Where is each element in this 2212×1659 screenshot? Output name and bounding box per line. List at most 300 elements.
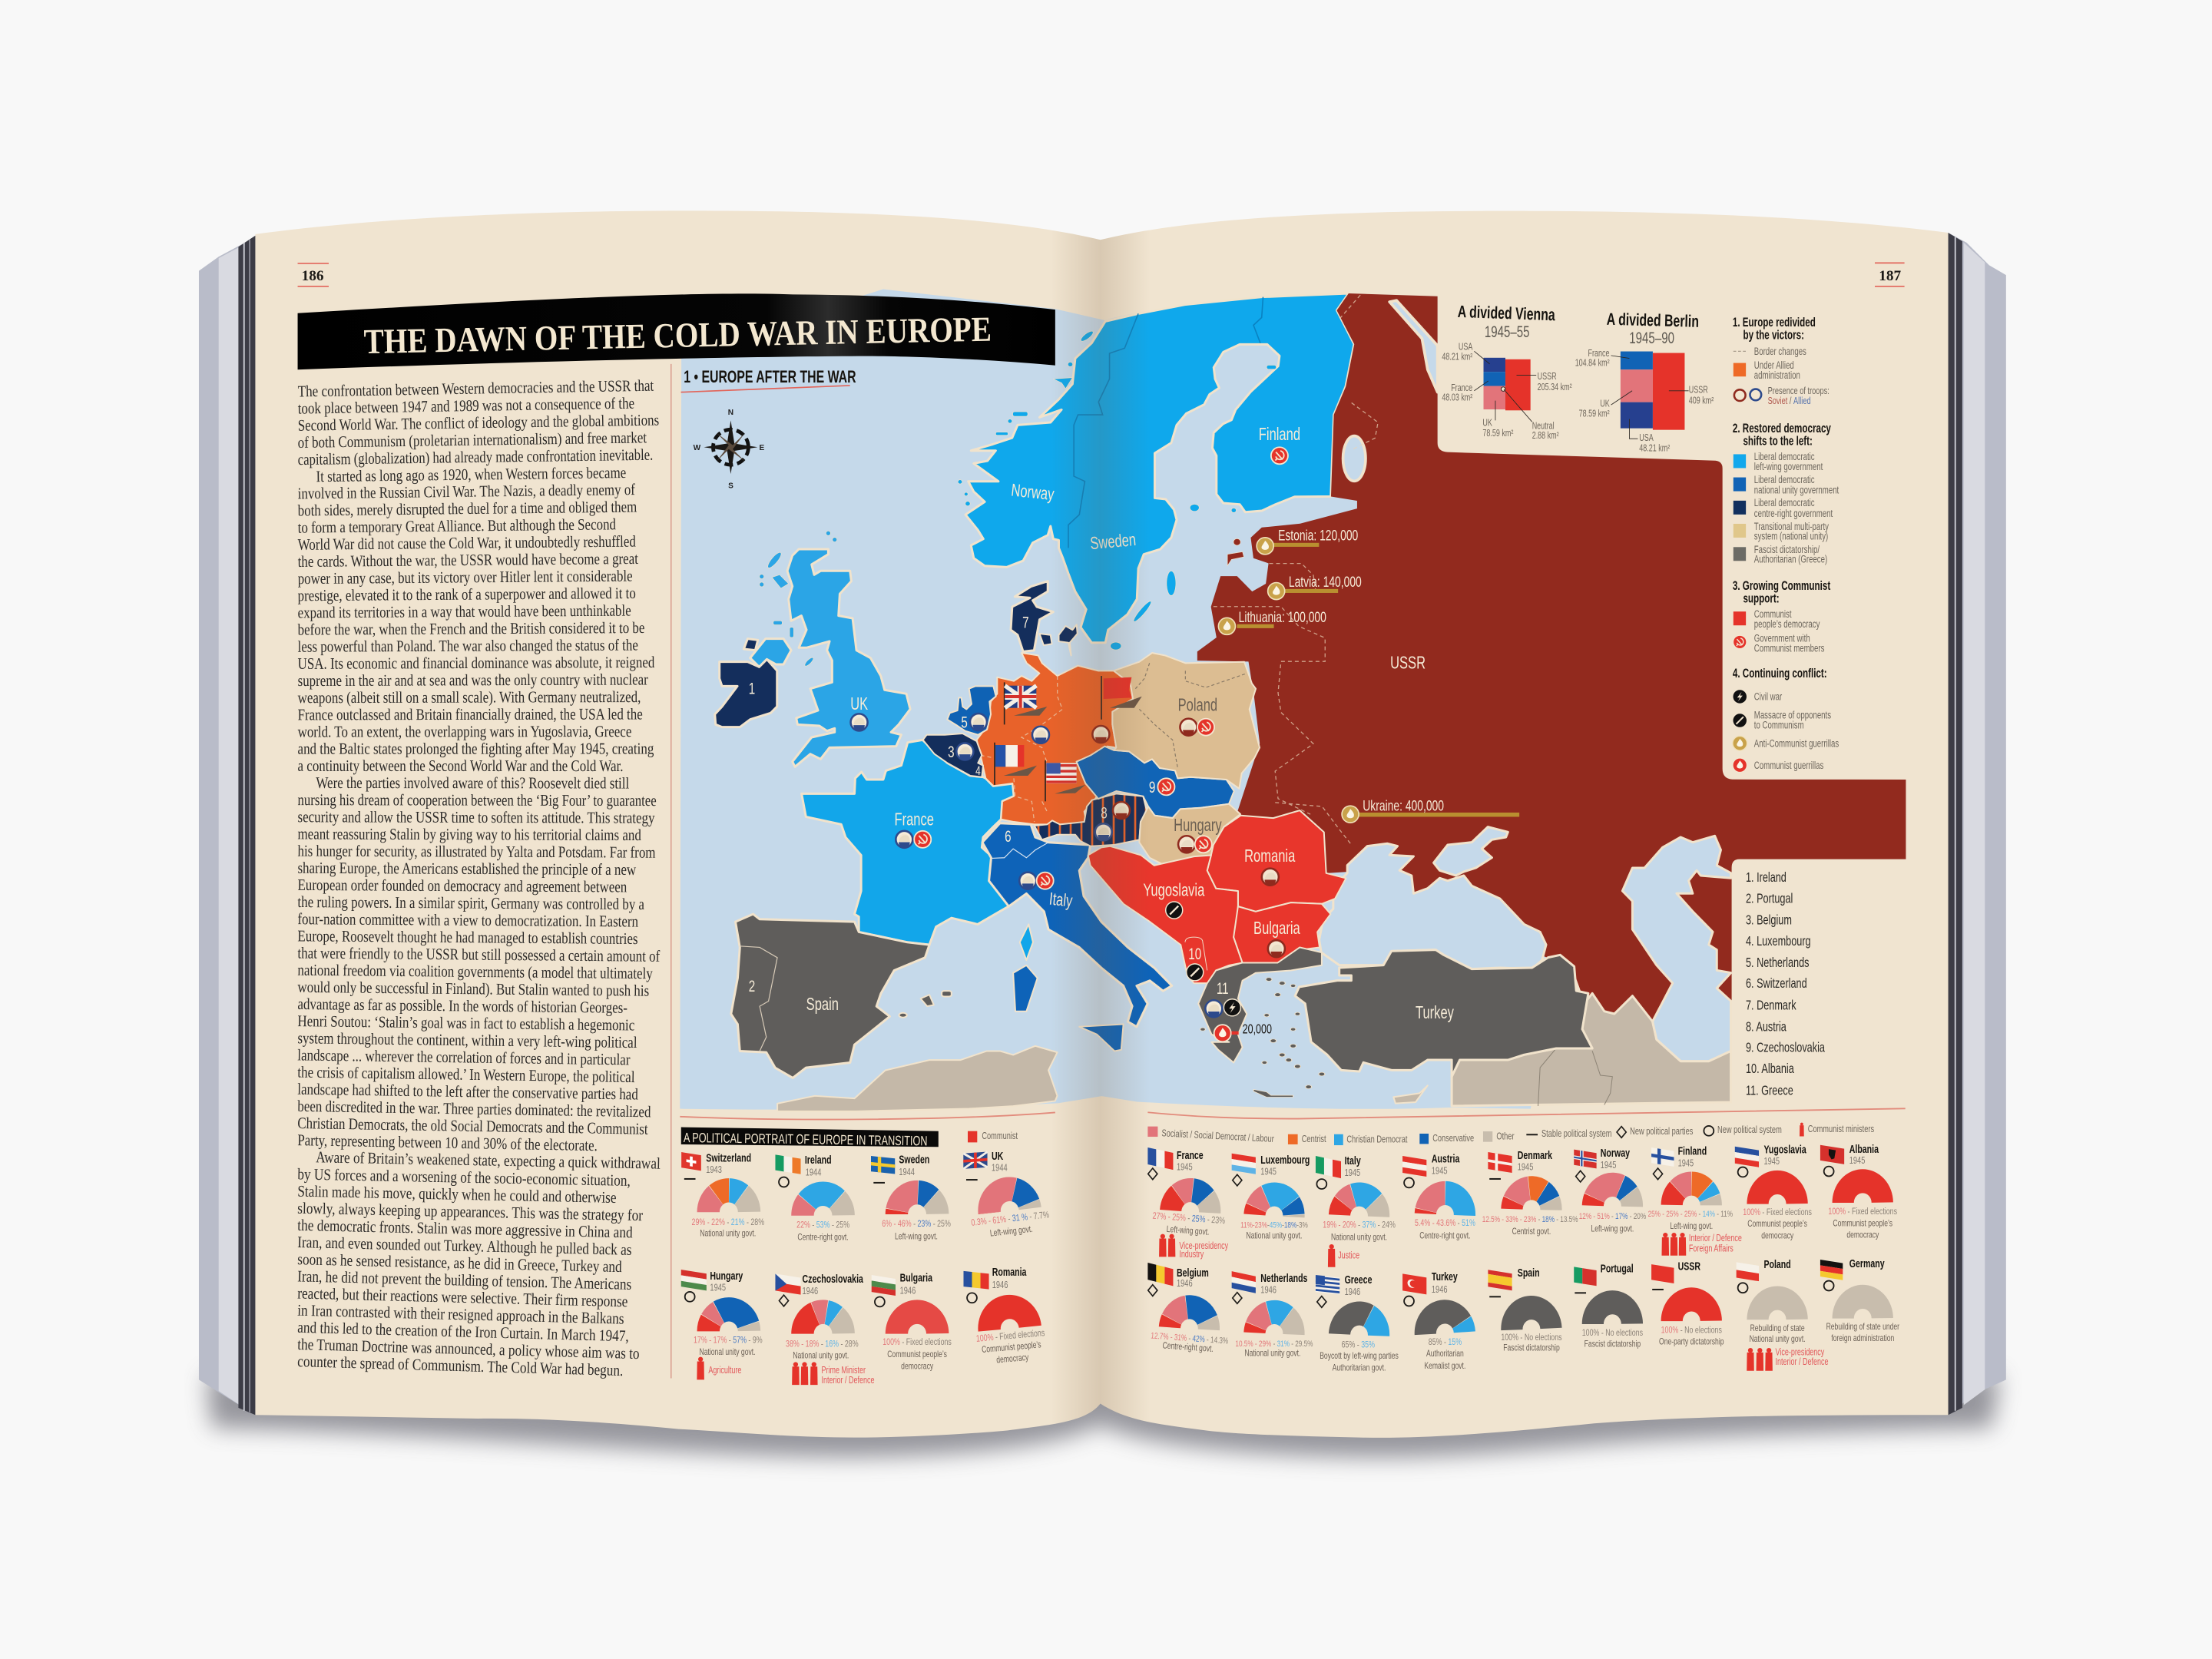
chart: Greece: 1946	[1345, 1287, 1360, 1298]
chart: Czechoslovakia: National unity govt.	[793, 1351, 849, 1361]
chart: Albania: 1945	[1849, 1156, 1865, 1167]
chart: Greece: Boycott by left-wing parties	[1320, 1352, 1399, 1361]
body text: advantage as far as possible. In the words of historian Georges-	[297, 995, 628, 1017]
chart: Poland	[1737, 1257, 1828, 1371]
chart: France: Industry	[1179, 1250, 1204, 1260]
page number 186	[298, 263, 329, 286]
chart: Yugoslavia: democracy	[1761, 1231, 1794, 1241]
chart: Germany: foreign administration	[1831, 1334, 1894, 1344]
legend group 2: left-wing government	[1754, 462, 1823, 472]
body text: of both Communism (proletarian internationalism) and free market	[298, 429, 647, 452]
chart: UK: 1944	[992, 1163, 1008, 1174]
legend group 1: Presence of troops:	[1768, 386, 1830, 397]
body text: less powerful than Poland. The war also changed the status of the	[298, 637, 638, 656]
guerrilla casualty bars: 20,000	[1243, 1022, 1272, 1037]
inset: divided Vienna: 78.59 km²	[1482, 429, 1514, 439]
legend group 3	[1733, 578, 1830, 654]
numbered country list: 8. Austria	[1746, 1019, 1786, 1035]
chart: Portugal: Fascist dictatorship	[1584, 1340, 1641, 1349]
book drop shadow	[206, 1376, 2000, 1458]
body text: prestige, elevated it to the rank of a superpower and allowed it to	[298, 584, 636, 605]
body text: involved in the Russian Civil War. The Nazis, a deadly enemy of	[298, 481, 636, 503]
country labels: 10	[1188, 944, 1201, 963]
chart: Sweden: Sweden	[899, 1153, 929, 1166]
inset: divided Berlin: 409 km²	[1689, 396, 1714, 406]
chart: Hungary: 1945	[710, 1283, 726, 1293]
chart: USSR	[1651, 1260, 1724, 1347]
chart: Romania: Romania	[992, 1265, 1027, 1279]
body text: the ruling powers. In a similar spirit, Germany was controlled by a	[297, 893, 645, 914]
chart: Sweden: Left-wing govt.	[895, 1232, 938, 1242]
chart: Netherlands: 10.5% - 29% - 31% - 29.5%	[1235, 1339, 1313, 1349]
chart: Denmark: 1945	[1518, 1162, 1533, 1173]
chart: USSR: USSR	[1678, 1260, 1700, 1273]
chart: Finland: Foreign Affairs	[1689, 1243, 1734, 1254]
chart: Ireland: Centre-right govt.	[797, 1233, 849, 1243]
chart: Netherlands: Netherlands	[1260, 1271, 1307, 1285]
inset: divided Vienna: A divided Vienna	[1457, 303, 1555, 325]
chart: Czechoslovakia	[775, 1272, 874, 1386]
chart: Denmark	[1482, 1148, 1578, 1237]
legend group 2: shifts to the left:	[1743, 434, 1813, 448]
body text: Iran, and even sounded out Turkey. Although he pulled back as	[297, 1234, 632, 1259]
chart: Germany	[1820, 1257, 1899, 1344]
legend group 4	[1733, 666, 1839, 773]
legend group 2: Fascist dictatorship/	[1754, 545, 1820, 556]
land: North Africa	[777, 1046, 1058, 1111]
party colour legend: Communist ministers	[1808, 1124, 1874, 1134]
chart: Finland: 25% - 25% - 25% - 14% - 11%	[1648, 1210, 1733, 1219]
chart: UK: Left-wing govt.	[989, 1225, 1033, 1239]
chart: Hungary	[681, 1269, 763, 1379]
body text: in Iran contrasted with their resigned approach in the Balkans	[297, 1302, 624, 1328]
chart: Austria: Centre-right govt.	[1419, 1231, 1471, 1241]
chart: Switzerland: 1943	[706, 1165, 722, 1175]
chart: Greece: 65% - 35%	[1342, 1339, 1375, 1350]
guerrilla casualty bars: Lithuania: 100,000	[1239, 609, 1326, 626]
inset: divided Berlin: USA	[1639, 433, 1654, 444]
country labels: 5	[961, 713, 968, 731]
body text: sharing Europe, the Americans established the principle of a new	[297, 859, 636, 879]
land: USSR	[1197, 293, 1906, 1051]
chart: Poland: Vice-presidency	[1776, 1347, 1825, 1358]
chart: Czechoslovakia: Prime Minister	[822, 1366, 866, 1376]
title banner	[298, 293, 1055, 369]
chart: Romania: 1946	[992, 1280, 1008, 1290]
land: Balkans	[1088, 810, 1346, 1097]
chart: Poland: Interior / Defence	[1776, 1357, 1828, 1367]
body text: Stalin made his move, quickly when he could and otherwise	[297, 1183, 617, 1207]
occupation flags in Germany	[995, 676, 1142, 801]
inset: divided Vienna: USSR	[1538, 372, 1557, 382]
chart: Turkey: Turkey	[1432, 1270, 1459, 1283]
body text: landscape had shifted to the left after the conservative parties had	[297, 1081, 638, 1104]
chart: Finland	[1648, 1144, 1742, 1256]
body text: security and allow the USSR time to soften its attitude. This strategy	[297, 809, 655, 827]
chart: Yugoslavia: 1945	[1763, 1157, 1780, 1167]
map markers	[851, 447, 1288, 1041]
party colour legend: Socialist / Social Democrat / Labour	[1161, 1128, 1274, 1144]
body text: European order founded on democracy and agreement between	[297, 876, 628, 896]
chart: Italy: Justice	[1338, 1250, 1359, 1261]
chart: Norway: Left-wing govt.	[1591, 1224, 1634, 1234]
country labels: 9	[1149, 778, 1155, 796]
chart: Albania: democracy	[1846, 1231, 1879, 1240]
legend	[1733, 315, 1839, 773]
chart: Poland: Rebuilding of state	[1750, 1324, 1805, 1333]
chart: Czechoslovakia: 1946	[803, 1286, 818, 1297]
chart: Norway	[1574, 1146, 1646, 1234]
chart: Italy: 1945	[1345, 1168, 1360, 1179]
country labels: Romania	[1244, 847, 1296, 866]
chart: Ireland: 1944	[806, 1167, 821, 1178]
party colour legend: Stable political system	[1541, 1129, 1611, 1139]
body text: soon as he sensed resistance, as he did in Greece, Turkey and	[297, 1251, 622, 1277]
chart: Portugal: 100% - No elections	[1582, 1328, 1643, 1338]
chart: Bulgaria: 1946	[900, 1286, 916, 1296]
body text: counter the spread of Communism. The Cold War had begun.	[297, 1353, 624, 1380]
chart: Hungary: National unity govt.	[700, 1348, 756, 1357]
chart: Bulgaria: democracy	[901, 1363, 934, 1372]
party colour legend: New political system	[1717, 1125, 1782, 1136]
body text: national freedom via coalition governments (a model that ultimately	[297, 962, 653, 983]
legend group 2: Authoritarian (Greece)	[1754, 554, 1827, 565]
body text: Were the parties involved aware of this? Roosevelt died still	[316, 774, 629, 793]
chart: Spain: 100% - No elections	[1501, 1333, 1562, 1343]
chart: Netherlands: National unity govt.	[1244, 1349, 1300, 1359]
country labels: Bulgaria	[1253, 919, 1300, 939]
country labels: 6	[1005, 826, 1012, 845]
land: Spain and Portugal	[731, 823, 1172, 1078]
chart: Belgium: Centre-right govt.	[1162, 1341, 1214, 1354]
chart: Netherlands: 1946	[1260, 1285, 1277, 1296]
legend group 4: Civil war	[1754, 691, 1782, 703]
chart: Switzerland: National unity govt.	[700, 1229, 756, 1239]
chart: Turkey: Authoritarian	[1426, 1349, 1464, 1359]
chart: USSR: One-party dictatorship	[1659, 1337, 1724, 1347]
body text: World War did not cause the Cold War, it undoubtedly reshuffled	[298, 533, 636, 554]
legend group 2: Liberal democratic	[1754, 498, 1815, 509]
inset: divided Vienna: USA	[1459, 342, 1473, 353]
map of Europe after the war	[680, 290, 1906, 1111]
body text: landscape ... wherever the correlation of forces and in particular	[297, 1047, 631, 1069]
numbered country list: 9. Czechoslovakia	[1746, 1041, 1825, 1055]
page number 186: 186	[302, 268, 324, 284]
numbered country list: 6. Switzerland	[1746, 976, 1807, 992]
body text: capitalism (globalization) had already made confrontation inevitable.	[298, 446, 653, 469]
legend group 3: people’s democracy	[1754, 618, 1820, 630]
country labels: Spain	[806, 995, 839, 1015]
legend group 2: Liberal democratic	[1754, 475, 1815, 486]
chart: Ireland: 22% - 53% - 25%	[796, 1220, 849, 1230]
country labels: Sweden	[1089, 531, 1137, 554]
chart: France: 27% - 25% - 25% - 23%	[1152, 1210, 1226, 1227]
legend group 2: Liberal democratic	[1754, 451, 1815, 462]
country labels: USSR	[1390, 654, 1426, 673]
body text: nursing his dream of cooperation between the ‘Big Four’ to guarantee	[298, 791, 657, 810]
chart: France	[1147, 1147, 1229, 1260]
chart: Italy: Italy	[1345, 1154, 1361, 1167]
numbered country list: 1. Ireland	[1746, 870, 1786, 886]
inset: divided Berlin: France	[1588, 349, 1610, 359]
body text: by US forces and a worsening of the socio-economic situation,	[297, 1166, 631, 1190]
chart: Luxembourg	[1232, 1153, 1310, 1241]
country labels: Norway	[1010, 481, 1055, 505]
country labels: 3	[948, 742, 955, 760]
chart: Finland: Left-wing govt.	[1670, 1222, 1713, 1232]
section heading: Europe after the war: 1 • EUROPE AFTER THE WAR	[684, 368, 856, 386]
chart: Spain	[1488, 1266, 1562, 1353]
legend group 3: Communist	[1754, 608, 1792, 620]
legend group 3: Communist members	[1754, 643, 1825, 654]
left page stack	[199, 236, 255, 1415]
inset: divided Berlin: 78.59 km²	[1579, 409, 1610, 419]
body text: and this led to the creation of the Iron Curtain. In March 1947,	[297, 1319, 629, 1346]
country labels: 4	[975, 764, 981, 779]
chart: Austria: 1945	[1432, 1166, 1447, 1177]
legend group 1: by the victors:	[1743, 327, 1804, 342]
chart: Luxembourg: 11%-23%-45%-18%-3%	[1240, 1220, 1308, 1230]
party colour legend: Christian Democrat	[1346, 1134, 1408, 1145]
chart: Bulgaria	[872, 1271, 952, 1372]
inset: divided Berlin	[1575, 310, 1714, 454]
inset: divided Berlin: 104.84 km²	[1575, 358, 1610, 369]
country labels: Finland	[1259, 426, 1300, 445]
compass rose: E	[759, 444, 764, 452]
body text: Iran, he did not prevent the building of tension. The Americans	[297, 1268, 632, 1293]
body text: power in any case, but its victory over Hitler lent it considerable	[298, 568, 633, 588]
USSR internal borders	[1214, 295, 1378, 845]
body text: Aware of Britain’s weakened state, expecting a quick withdrawal	[316, 1149, 661, 1173]
body text: Europe, Roosevelt thought he had managed to establish countries	[297, 928, 638, 949]
body text: Second World War. The conflict of ideology and the global ambitions	[298, 412, 659, 435]
country labels: Poland	[1178, 696, 1217, 715]
chart: Spain: Spain	[1518, 1266, 1540, 1279]
White Sea and Lake Ladoga	[1343, 300, 1438, 481]
land: Italy and Switzerland	[982, 823, 1172, 1027]
chart: Albania: Communist people’s	[1833, 1219, 1892, 1229]
chart: Poland: National unity govt.	[1750, 1335, 1806, 1345]
chart: Switzerland	[681, 1151, 764, 1239]
chart: Hungary: 17% - 17% - 57% - 9%	[694, 1335, 763, 1346]
legend group 4: Massacre of opponents	[1754, 710, 1831, 721]
body text: the democratic fronts. Stalin was more aggressive in China and	[297, 1217, 633, 1242]
country labels: Italy	[1048, 889, 1074, 911]
country labels: 1	[749, 679, 755, 697]
legend group 2: 2. Restored democracy	[1733, 421, 1831, 435]
chart: Italy: 19% - 20% - 37% - 24%	[1323, 1220, 1396, 1230]
numbered country list: 5. Netherlands	[1746, 955, 1810, 970]
numbered country list: 2. Portugal	[1746, 892, 1793, 906]
country labels: France	[894, 810, 934, 830]
chart: Germany: Germany	[1849, 1257, 1885, 1270]
land: Belgium	[923, 733, 983, 777]
legend group 4: to Communism	[1754, 720, 1804, 731]
inset: divided Berlin: 1945–90	[1629, 329, 1674, 347]
legend group 1	[1733, 315, 1830, 406]
inset: divided Berlin: USSR	[1689, 385, 1708, 396]
legend group 3: support:	[1743, 591, 1780, 605]
chart: Yugoslavia: Yugoslavia	[1763, 1143, 1806, 1156]
chart: Albania	[1820, 1142, 1897, 1240]
legend group 4: 4. Continuing conflict:	[1733, 666, 1827, 680]
legend group 1: Border changes	[1754, 346, 1806, 358]
chart: Belgium	[1147, 1263, 1230, 1356]
body text: system throughout the continent, within a very left-wing political	[297, 1030, 637, 1052]
country labels: 11	[1217, 979, 1229, 998]
legend group 4: Communist guerrillas	[1754, 760, 1824, 771]
legend group 3: 3. Growing Communist	[1733, 578, 1830, 592]
right page stack	[1949, 233, 2006, 1415]
compass rose: N	[728, 409, 733, 417]
chart: Belgium: 1946	[1177, 1279, 1193, 1290]
body text: four-nation committee with a view to democratization. In Eastern	[297, 911, 639, 931]
page number 187	[1875, 263, 1905, 286]
chart: Turkey: Kemalist govt.	[1424, 1362, 1465, 1371]
compass rose	[694, 409, 764, 491]
land: Britain and Ireland	[715, 531, 910, 767]
land: Germany	[923, 653, 1260, 866]
legend: communist: Communist	[982, 1131, 1018, 1141]
chart: Sweden	[871, 1153, 951, 1242]
body text: world. To an extent, the overlapping wars in Yugoslavia, Greece	[298, 723, 631, 741]
inset: divided Vienna: 48.03 km²	[1442, 392, 1473, 403]
numbered country list: 4. Luxembourg	[1746, 934, 1811, 949]
chart: Portugal	[1574, 1262, 1643, 1349]
chart: Turkey	[1402, 1270, 1465, 1371]
body text	[297, 377, 661, 1380]
body text: weapons (albeit still on a small scale). With Germany neutralized,	[298, 688, 641, 707]
chart: Yugoslavia	[1735, 1143, 1812, 1241]
numbered country list: 11. Greece	[1746, 1083, 1793, 1098]
chart: Norway: 12% - 51% - 17% - 20%	[1579, 1212, 1646, 1222]
country labels: 8	[1101, 803, 1108, 822]
legend group 1: 1. Europe redivided	[1733, 315, 1816, 329]
chart: Luxembourg: 1945	[1260, 1167, 1277, 1177]
land: Netherlands	[947, 686, 996, 735]
country labels: 2	[749, 976, 755, 995]
text column divider	[671, 364, 672, 1378]
body text: the crisis of capitalism allowed.’ In Western Europe, the political	[297, 1064, 635, 1087]
country labels: 7	[1022, 613, 1029, 631]
legend group 2	[1733, 421, 1839, 565]
chart: Finland: Finland	[1678, 1144, 1707, 1157]
chart: Hungary: Agriculture	[708, 1366, 741, 1376]
body text: that were friendly to the USSR but still possessed a certain amount of	[297, 945, 661, 965]
chart: Bulgaria: 100% - Fixed elections	[882, 1337, 952, 1348]
party colour legend: New political parties	[1630, 1127, 1694, 1137]
chart: Denmark: Denmark	[1518, 1148, 1553, 1162]
inset: divided Vienna: UK	[1482, 418, 1493, 429]
sea	[680, 290, 1551, 1110]
chart: Finland: Interior / Defence	[1689, 1233, 1742, 1244]
rule lines under map	[680, 1108, 1906, 1120]
chart: Netherlands	[1232, 1271, 1313, 1359]
heading: political portrait: A POLITICAL PORTRAIT OF EUROPE IN TRANSITION	[684, 1131, 928, 1149]
chart: Spain: Fascist dictatorship	[1503, 1343, 1560, 1353]
guerrilla casualty bars: Latvia: 140,000	[1289, 574, 1362, 591]
chart: Portugal: Portugal	[1601, 1262, 1634, 1275]
legend: communist	[968, 1131, 1018, 1142]
chart: Greece: Greece	[1345, 1273, 1372, 1286]
body text: reacted, but their reactions were selective. Their firm response	[297, 1285, 628, 1311]
inset: divided Berlin: A divided Berlin	[1607, 310, 1699, 332]
numbered country list	[1746, 870, 1825, 1098]
chart: Yugoslavia: Communist people’s	[1747, 1220, 1807, 1229]
chart: Greece: Authoritarian govt.	[1333, 1363, 1386, 1373]
chart: Denmark: Centrist govt.	[1512, 1227, 1551, 1237]
chart: Albania: Albania	[1849, 1142, 1879, 1156]
inset: divided Vienna	[1442, 303, 1572, 442]
open book pages	[255, 210, 1949, 1438]
chart: Yugoslavia: 100% - Fixed elections	[1743, 1207, 1812, 1218]
body text: a continuity between the Second World War and the Cold War.	[298, 757, 623, 776]
chart: Poland: Poland	[1763, 1257, 1791, 1271]
chart: Albania: 100% - Fixed elections	[1828, 1207, 1897, 1217]
body text: both sides, merely disrupted the duel for a time and obliged them	[298, 498, 637, 520]
body text: would only be successful in Finland). But Stalin wanted to push his	[297, 979, 649, 1000]
chart: Czechoslovakia: 38% - 18% - 16% - 28%	[786, 1339, 859, 1349]
body text: France outclassed and Britain financially drained, the USA led the	[298, 706, 643, 724]
legend group 3: Government with	[1754, 633, 1810, 644]
body text: slowly, always keeping up appearances. This was the strategy for	[297, 1200, 644, 1225]
chart: Hungary: Hungary	[710, 1269, 743, 1282]
legend group 1: Soviet / Allied	[1768, 396, 1811, 406]
land: France	[802, 740, 1014, 945]
chart: UK: 0.3% - 61% - 31 % - 7.7%	[971, 1210, 1050, 1228]
country labels: UK	[850, 694, 869, 714]
chart: Italy	[1316, 1154, 1396, 1267]
party colour legend: Other	[1496, 1131, 1515, 1142]
body text: The confrontation between Western democracies and the USSR that	[298, 377, 654, 401]
land: Austria striped	[1035, 793, 1147, 846]
numbered country list: 10. Albania	[1746, 1061, 1794, 1077]
chart: Ireland	[775, 1153, 849, 1243]
chart: Romania	[963, 1265, 1047, 1367]
land: Scandinavia	[958, 293, 1354, 655]
body text: It started as long ago as 1920, when Western forces became	[316, 464, 626, 486]
legend group 1: administration	[1754, 370, 1800, 382]
body text: Henri Soutou: ‘Stalin’s goal was in fact to establish a hegemonic	[297, 1012, 634, 1035]
chart: Luxembourg: National unity govt.	[1246, 1231, 1302, 1241]
inset: divided Vienna: 2.88 km²	[1532, 431, 1559, 442]
spine gutter shading	[1062, 233, 1138, 1422]
chart: Sweden: 1944	[899, 1167, 915, 1177]
legend group 2: system (national unity)	[1754, 531, 1828, 542]
chart: Austria	[1402, 1152, 1475, 1241]
chart: Sweden: 6% - 46% - 23% - 25%	[882, 1219, 951, 1229]
inset: divided Berlin: UK	[1600, 399, 1610, 409]
guerrilla casualty bars	[1218, 527, 1519, 1037]
body text: the Truman Doctrine was announced, a policy whose aim was to	[297, 1336, 640, 1363]
chart: Romania: Communist people’s	[982, 1340, 1041, 1355]
chart: Turkey: 85% - 15%	[1429, 1337, 1462, 1348]
party colour legend: Centrist	[1302, 1134, 1326, 1144]
chart: Norway: 1945	[1601, 1161, 1616, 1171]
compass rose: S	[728, 482, 733, 491]
chart: Finland: 1945	[1678, 1158, 1694, 1169]
chart: USSR: 100% - No elections	[1661, 1325, 1722, 1336]
chart: Germany: Rebuilding of state under	[1826, 1323, 1899, 1333]
inset: divided Vienna: Neutral	[1532, 421, 1555, 432]
chart: UK: UK	[992, 1149, 1004, 1163]
inset: divided Vienna: 1945–55	[1485, 322, 1530, 341]
country labels: Turkey	[1416, 1004, 1454, 1023]
chart: Austria: 5.4% - 43.6% - 51%	[1415, 1218, 1475, 1229]
title banner: THE DAWN OF THE COLD WAR IN EUROPE	[363, 310, 992, 361]
chart: Bulgaria: Bulgaria	[900, 1271, 933, 1284]
Black Sea, Azov and Caspian	[1295, 827, 1731, 1106]
